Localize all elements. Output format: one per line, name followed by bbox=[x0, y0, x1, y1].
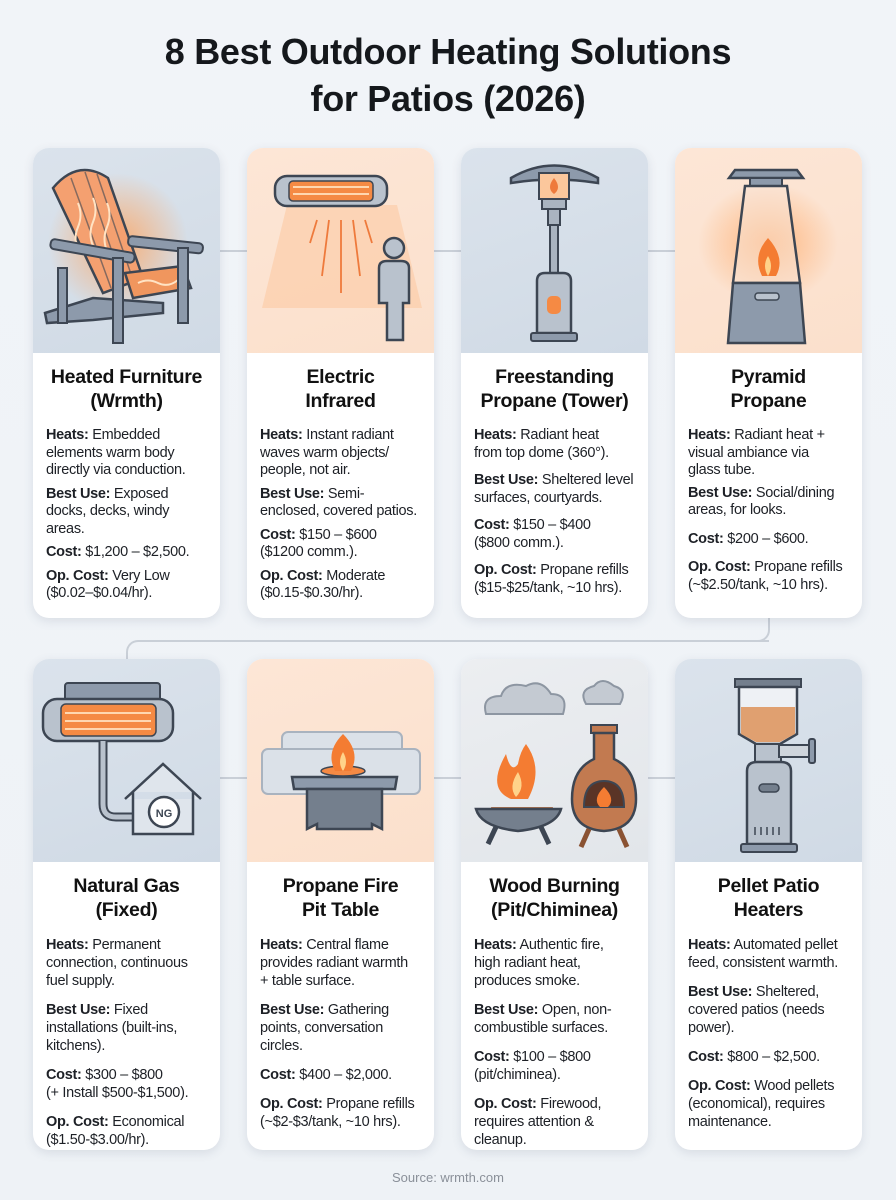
text: pellet patio heaters: Pellet Patio Heaters bbox=[718, 875, 819, 921]
text: natural gas: kitchens). bbox=[46, 1038, 105, 1054]
text: wood burning: Op. Cost: Firewood, bbox=[474, 1096, 601, 1112]
text: natural gas: ($1.50-$3.00/hr). bbox=[46, 1132, 149, 1148]
text: pellet patio heaters: Op. Cost: Wood pellets bbox=[688, 1078, 834, 1094]
text: freestanding propane: Cost: $150 – $400 bbox=[474, 517, 591, 533]
text: propane fire pit table: Best Use: Gathering bbox=[260, 1002, 389, 1018]
title bbox=[165, 31, 731, 119]
text: pyramid propane: Cost: $200 – $600. bbox=[688, 530, 808, 546]
text: pellet patio heaters: feed, consistent warmth. bbox=[688, 955, 838, 971]
connector: row 1 to row 2 bbox=[126, 618, 770, 659]
text: pellet patio heaters bbox=[688, 875, 838, 1130]
text: pyramid propane: Best Use: Social/dining bbox=[688, 484, 834, 500]
text: natural gas: Heats: Permanent bbox=[46, 937, 160, 953]
text: electric infrared: Heats: Instant radiant bbox=[260, 427, 394, 443]
text: electric infrared: Infrared bbox=[305, 390, 376, 412]
text: pyramid propane: Pyramid bbox=[731, 366, 806, 388]
text: electric infrared: Best Use: Semi- bbox=[260, 486, 364, 502]
text: propane fire pit table: + table surface. bbox=[260, 973, 355, 989]
text: wood burning: Best Use: Open, non- bbox=[474, 1002, 611, 1018]
text: pyramid propane: visual ambiance via bbox=[688, 444, 809, 460]
text: wood burning: Cost: $100 – $800 bbox=[474, 1049, 591, 1065]
text: heated furniture: docks, decks, windy bbox=[46, 503, 169, 519]
text: propane fire pit table: Heats: Central flame bbox=[260, 937, 389, 953]
text: heated furniture: Heated Furniture (Wrmth) bbox=[51, 366, 202, 412]
text: propane fire pit table: provides radiant warmth bbox=[260, 955, 408, 971]
panel: natural gas bbox=[33, 659, 220, 1150]
text: propane fire pit table: Pit Table bbox=[302, 899, 379, 921]
text: pyramid propane: (~$2.50/tank, ~10 hrs). bbox=[688, 576, 828, 592]
icon: gas heater with house bbox=[33, 659, 220, 862]
text: natural gas: Cost: $300 – $800 bbox=[46, 1067, 163, 1083]
text: freestanding propane: ($800 comm.). bbox=[474, 534, 564, 550]
text: pellet patio heaters: (economical), requires bbox=[688, 1096, 825, 1112]
text: freestanding propane: Freestanding Propane (Tower) bbox=[481, 366, 628, 412]
text: natural gas: fuel supply. bbox=[46, 973, 115, 989]
text: electric infrared: Electric bbox=[306, 366, 375, 388]
text: natural gas: Op. Cost: Economical bbox=[46, 1114, 184, 1130]
text: pyramid propane: Op. Cost: Propane refills bbox=[688, 559, 842, 575]
text: electric infrared: waves warm objects/ bbox=[260, 444, 389, 460]
text: natural gas bbox=[46, 875, 188, 1148]
text: propane fire pit table bbox=[260, 875, 414, 1130]
text: electric infrared: Cost: $150 – $600 bbox=[260, 526, 377, 542]
text: heated furniture: Cost: $1,200 – $2,500. bbox=[46, 544, 189, 560]
text: natural gas: Best Use: Fixed bbox=[46, 1002, 148, 1018]
text: pyramid propane: areas, for looks. bbox=[688, 502, 786, 518]
icon: heated chair bbox=[33, 148, 220, 353]
panel: pellet patio heaters bbox=[675, 659, 862, 1150]
text: electric infrared: ($1200 comm.). bbox=[260, 544, 357, 560]
icon: fire pit table with sofa bbox=[247, 659, 434, 862]
text: electric infrared: Op. Cost: Moderate bbox=[260, 568, 385, 584]
text: pyramid propane: glass tube. bbox=[688, 462, 755, 478]
text: freestanding propane: ($15-$25/tank, ~10 hrs). bbox=[474, 580, 622, 596]
text: propane fire pit table: Propane Fire bbox=[283, 875, 398, 897]
text: electric infrared bbox=[260, 366, 417, 601]
panel: propane fire pit table bbox=[247, 659, 434, 1150]
icon: gas heater with house: NG bbox=[156, 808, 172, 820]
text: pyramid propane: Heats: Radiant heat + bbox=[688, 427, 825, 443]
text: pellet patio heaters: covered patios (needs bbox=[688, 1002, 824, 1018]
text: heated furniture: Heats: Embedded bbox=[46, 427, 160, 443]
text: freestanding propane: from top dome (360°). bbox=[474, 444, 609, 460]
text: wood burning: (pit/chiminea). bbox=[474, 1067, 561, 1083]
text: propane fire pit table: circles. bbox=[260, 1038, 303, 1054]
text: heated furniture: Best Use: Exposed bbox=[46, 486, 168, 502]
text: heated furniture: directly via conduction. bbox=[46, 462, 186, 478]
text: wood burning: high radiant heat, bbox=[474, 955, 581, 971]
connector: row 1 bbox=[220, 250, 675, 252]
text: natural gas: installations (built-ins, bbox=[46, 1020, 177, 1036]
text: wood burning: Heats: Authentic fire, bbox=[474, 937, 604, 953]
text: freestanding propane bbox=[474, 366, 633, 596]
text: natural gas: connection, continuous bbox=[46, 955, 188, 971]
text: electric infrared: ($0.15-$0.30/hr). bbox=[260, 585, 363, 601]
text: propane fire pit table: Op. Cost: Propane refills bbox=[260, 1096, 414, 1112]
text: pellet patio heaters: power). bbox=[688, 1020, 734, 1036]
text: freestanding propane: surfaces, courtyards. bbox=[474, 490, 602, 506]
panel: electric infrared bbox=[247, 148, 434, 618]
icon: infrared heater and person bbox=[247, 148, 434, 353]
title: 8 Best Outdoor Heating Solutions bbox=[165, 31, 731, 72]
panel: wood burning bbox=[461, 659, 648, 1150]
text: wood burning: combustible surfaces. bbox=[474, 1020, 608, 1036]
text: heated furniture: areas. bbox=[46, 520, 84, 536]
text: wood burning: produces smoke. bbox=[474, 973, 580, 989]
panel: freestanding propane bbox=[461, 148, 648, 618]
text: pyramid propane: Propane bbox=[731, 390, 806, 412]
panel: pyramid propane bbox=[675, 148, 862, 618]
text: freestanding propane: Op. Cost: Propane refills bbox=[474, 562, 628, 578]
text: freestanding propane: Best Use: Sheltered level bbox=[474, 472, 633, 488]
text: heated furniture: elements warm body bbox=[46, 444, 174, 460]
text: natural gas: (+ Install $500-$1,500). bbox=[46, 1085, 188, 1101]
icon: propane tower heater bbox=[461, 148, 648, 353]
text: pellet patio heaters: Heats: Automated pellet bbox=[688, 937, 837, 953]
text: wood burning: cleanup. bbox=[474, 1132, 526, 1148]
source footer: Source: wrmth.com bbox=[392, 1170, 504, 1185]
text: wood burning bbox=[474, 875, 620, 1148]
icon: fire pit and chiminea bbox=[461, 659, 648, 862]
text: natural gas: Natural Gas (Fixed) bbox=[73, 875, 180, 921]
text: wood burning: Wood Burning (Pit/Chiminea) bbox=[489, 875, 620, 921]
text: heated furniture bbox=[46, 366, 202, 601]
text: pyramid propane bbox=[688, 366, 842, 592]
text: pellet patio heaters: Best Use: Sheltered, bbox=[688, 984, 819, 1000]
panel: heated furniture bbox=[33, 148, 220, 618]
text: electric infrared: people, not air. bbox=[260, 462, 350, 478]
text: heated furniture: ($0.02–$0.04/hr). bbox=[46, 585, 152, 601]
text: wood burning: requires attention & bbox=[474, 1114, 594, 1130]
text: freestanding propane: Heats: Radiant heat bbox=[474, 427, 599, 443]
text: propane fire pit table: points, conversation bbox=[260, 1020, 383, 1036]
text: propane fire pit table: (~$2-$3/tank, ~10 hrs). bbox=[260, 1114, 401, 1130]
text: pellet patio heaters: maintenance. bbox=[688, 1114, 771, 1130]
icon: pyramid heater bbox=[675, 148, 862, 353]
text: pellet patio heaters: Cost: $800 – $2,500. bbox=[688, 1049, 820, 1065]
icon: pellet heater bbox=[675, 659, 862, 862]
text: electric infrared: enclosed, covered patios. bbox=[260, 503, 417, 519]
text: heated furniture: Op. Cost: Very Low bbox=[46, 568, 170, 584]
title: for Patios (2026) bbox=[310, 78, 586, 119]
text: propane fire pit table: Cost: $400 – $2,000. bbox=[260, 1067, 392, 1083]
connector: row 2 bbox=[220, 777, 675, 779]
